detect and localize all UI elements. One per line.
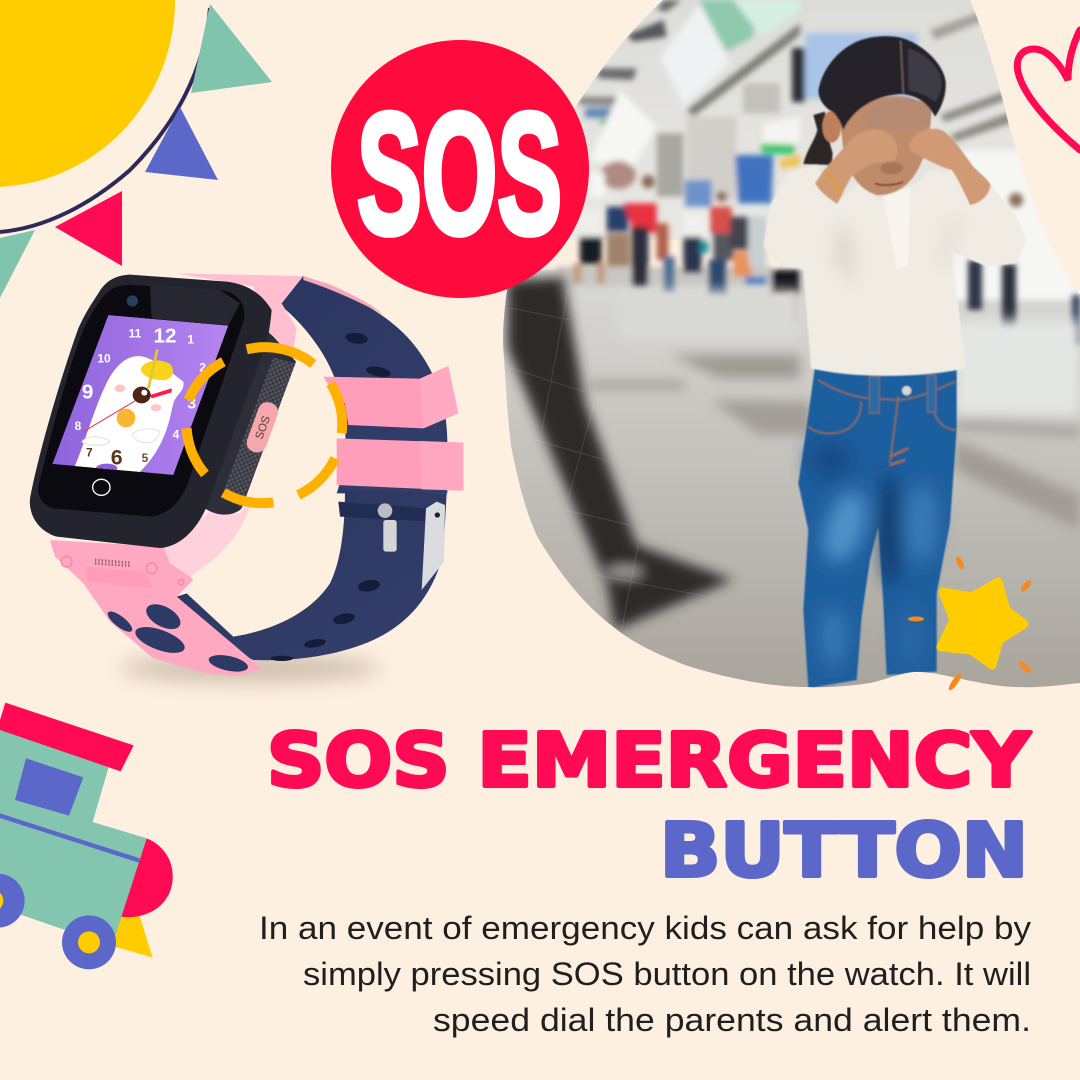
home button: [93, 479, 110, 495]
ponytail: [803, 112, 833, 165]
clock numbers: 2: [199, 360, 206, 374]
strap hole top: [345, 331, 369, 345]
fly stitching: [890, 448, 908, 465]
bottom shape: [96, 464, 118, 470]
SOS badge: [331, 40, 589, 298]
belt loops: [869, 375, 936, 413]
watch case front: [30, 275, 272, 548]
sun with navy ring: [0, 0, 210, 232]
clock numbers: 11: [129, 326, 142, 340]
toy train: [0, 703, 173, 969]
SOS side button: [244, 399, 281, 455]
pink strap edge: [303, 276, 383, 315]
lower navy strap: [177, 490, 447, 660]
strap hole second: [365, 365, 392, 378]
clock numbers: 1: [187, 332, 194, 346]
camera: [127, 295, 138, 307]
nose and shadow: [880, 162, 903, 174]
SOS side button: SOS: [254, 414, 273, 441]
cartoon bear: [73, 356, 184, 473]
description text: In an event of emergency kids can ask for help by: [259, 910, 1031, 946]
glass highlight: [150, 285, 240, 326]
clock numbers: 12: [154, 324, 176, 347]
mesh grip strip: [223, 357, 295, 508]
yellow star: [941, 582, 1024, 665]
station floor: [500, 270, 1080, 695]
mouth: [875, 182, 903, 185]
pink lower lug and strap: [50, 540, 262, 676]
jeans button: [902, 386, 911, 395]
clock numbers: 3: [187, 396, 196, 413]
train body: [0, 723, 147, 937]
hair highlight right: [908, 48, 942, 102]
faint grid lines over leg: [510, 290, 700, 628]
right forearm and fist: [909, 129, 991, 205]
star with sparks: [908, 555, 1033, 692]
watch side housing: [187, 300, 296, 515]
clock numbers: 10: [97, 352, 111, 366]
pink keeper loop bottom: [337, 438, 463, 491]
ear: [822, 111, 841, 143]
description text: simply pressing SOS button on the watch. It will: [303, 956, 1031, 992]
bear crown: [141, 360, 173, 380]
front wheel: [62, 915, 116, 969]
left forearm and fist: [815, 130, 897, 204]
placket: [883, 187, 910, 270]
clock numbers: 7: [86, 446, 93, 460]
lug screws: [61, 556, 184, 585]
glass face: [38, 285, 244, 517]
cab window: [15, 758, 83, 816]
girl upper body: [763, 36, 1027, 376]
description text: [259, 910, 1031, 1038]
description text: speed dial the parents and alert them.: [433, 1002, 1031, 1038]
floor tiles: [590, 290, 1080, 530]
blurred passing leg and shoe: [507, 277, 733, 630]
lug shelf: [85, 567, 153, 588]
clock numbers: [75, 324, 206, 470]
heart outline: [1017, 30, 1080, 150]
smartwatch: [30, 273, 463, 682]
sweater shading: [832, 229, 856, 276]
watch ground shadow: [120, 654, 380, 682]
clock numbers: 6: [111, 446, 123, 470]
dashed orange circle highlight: [187, 347, 342, 503]
navy arc: [0, 8, 210, 232]
SOS badge: SOS: [357, 78, 562, 270]
buckle: [338, 502, 445, 590]
ceiling, signs and columns: [578, 0, 1080, 300]
pink keeper loop top: [323, 366, 458, 428]
clock numbers: 8: [75, 419, 82, 433]
face: [840, 96, 932, 195]
hair parting: [901, 41, 903, 93]
bear paws: [82, 429, 160, 445]
photo: crying girl in station, blob shaped: [500, 0, 1080, 695]
lollipop: [117, 409, 135, 427]
bear cheeks: [115, 384, 125, 392]
clock numbers: 5: [142, 451, 149, 465]
upper navy strap: [280, 276, 447, 493]
lower strap holes: [270, 578, 381, 661]
roof: [0, 703, 134, 771]
sweater: [763, 165, 1027, 376]
clock hands: [83, 349, 172, 432]
screen: [52, 315, 228, 475]
stripe: [0, 813, 140, 863]
pink top lug: [177, 273, 303, 350]
bunting flags: [0, 4, 272, 298]
station ceiling: [568, 0, 1017, 240]
sun disc: [0, 0, 175, 187]
pink case body: [163, 493, 253, 577]
boiler nose: [121, 838, 173, 917]
denim shading: [807, 440, 938, 667]
speaker slots: [95, 560, 132, 566]
blurred crowd: [557, 175, 1080, 345]
bracelet: [824, 170, 840, 197]
jeans: [798, 363, 957, 688]
clock numbers: 9: [82, 381, 93, 404]
title line 2: BUTTON: [660, 808, 1028, 894]
clock numbers: 4: [173, 428, 180, 442]
rear wheel: [0, 874, 25, 928]
orange sparks: [908, 555, 1033, 692]
title line 1: SOS EMERGENCY: [267, 718, 1032, 804]
chimney cone: [115, 915, 153, 958]
waistband and stitching: [808, 380, 957, 463]
hair: [818, 36, 946, 130]
navy strap spots: [105, 599, 249, 675]
title: [267, 718, 1032, 894]
forehead haze: [860, 99, 932, 130]
